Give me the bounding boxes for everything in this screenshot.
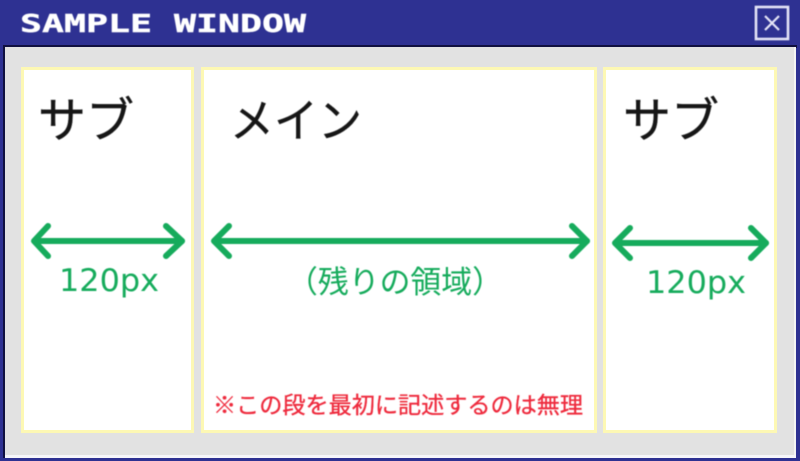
arrow: main width — [214, 226, 587, 256]
heading: main: メイン — [230, 95, 362, 147]
arrow: left width — [34, 226, 182, 256]
heading: right sub: サブ — [623, 95, 719, 148]
note: red warning: ※この段を最初に記述するのは無理 — [213, 392, 583, 418]
label: 120px left: 120px — [59, 263, 159, 299]
label: 120px right: 120px — [646, 265, 746, 301]
panel: left sub column — [22, 68, 192, 432]
panel: main column — [202, 68, 596, 432]
label: remaining area: （残りの領域） — [287, 265, 503, 300]
title: SAMPLE WINDOW: SAMPLE WINDOW — [20, 9, 307, 38]
arrow: right width — [615, 228, 766, 258]
icon: close button — [756, 7, 788, 39]
heading: left sub: サブ — [38, 95, 134, 148]
panel: right sub column — [604, 68, 776, 432]
